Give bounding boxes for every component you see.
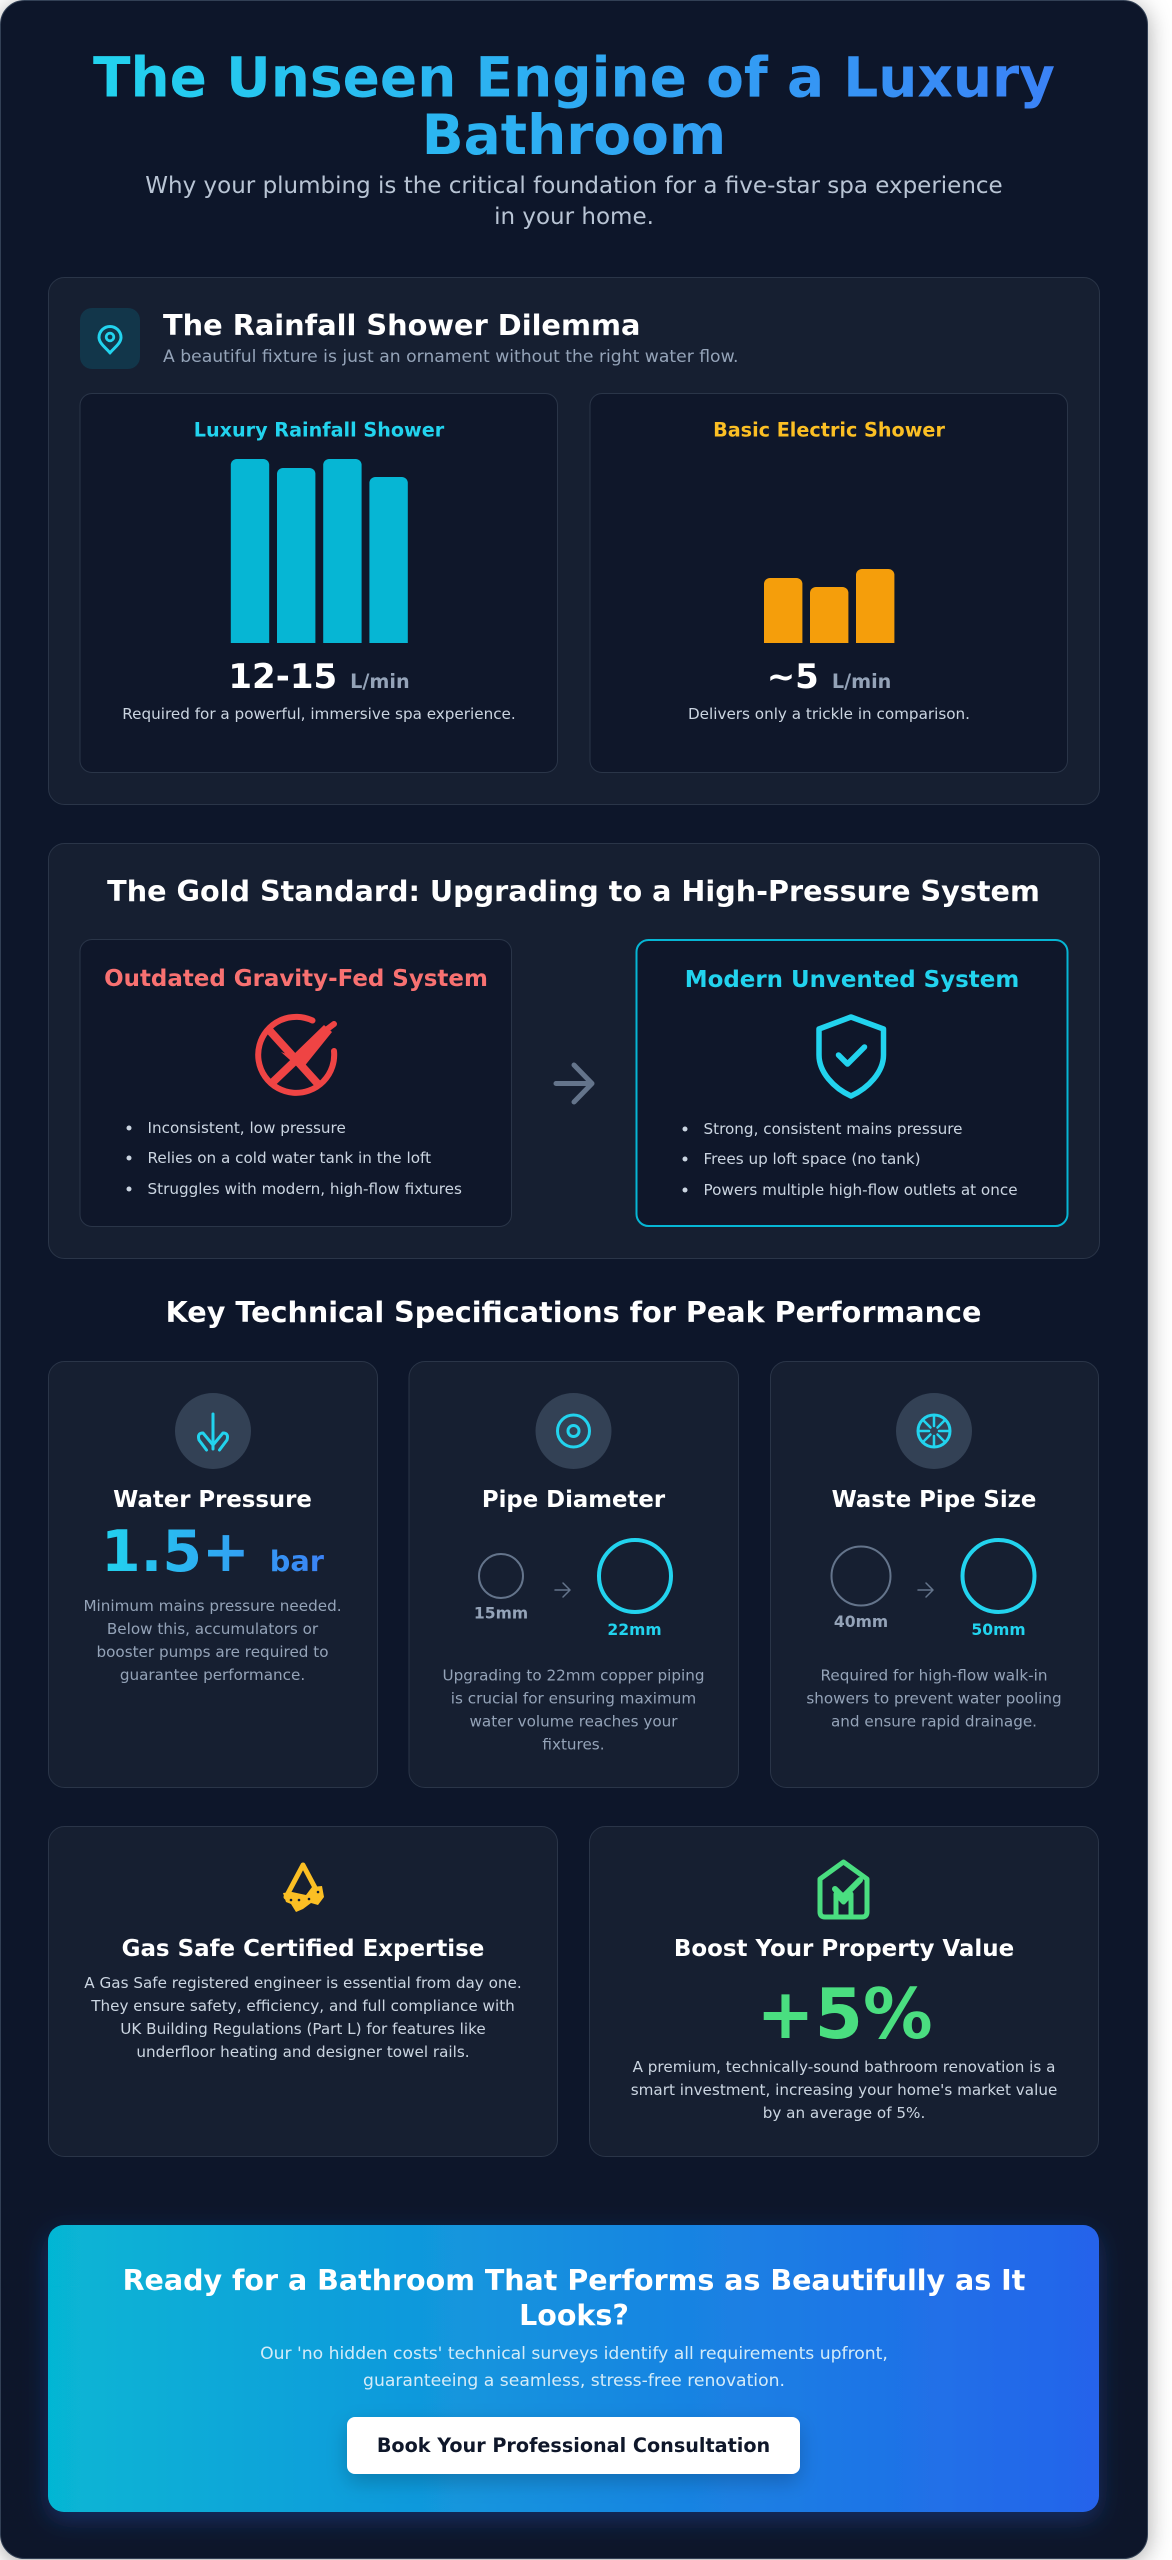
- description: Upgrading to 22mm copper piping: [442, 1666, 705, 1684]
- panel: luxury rainfall shower: [80, 394, 558, 772]
- panel: pipe diameter: [409, 1362, 738, 1788]
- diagram: 40mm to 50mm: 50mm: [971, 1621, 1026, 1639]
- icon: pipe section: [536, 1393, 612, 1469]
- diagram: 15mm to 22mm: 15mm: [474, 1604, 528, 1622]
- arrow: [556, 1065, 592, 1102]
- description: A Gas Safe registered engineer is essential from day one.: [84, 1974, 522, 1992]
- panel: basic electric shower: [590, 394, 1068, 772]
- description: They ensure safety, efficiency, and full compliance with: [90, 1997, 515, 2015]
- panel heading: Modern Unvented System: [685, 967, 1019, 993]
- card heading: Boost Your Property Value: [674, 1936, 1014, 1962]
- description: Minimum mains pressure needed.: [83, 1597, 342, 1615]
- bullet list: [126, 1119, 462, 1198]
- flow rate value: 12-15 L/min: [228, 657, 410, 697]
- cta heading: Looks?: [519, 2299, 629, 2332]
- icon: shield check: [819, 1017, 884, 1096]
- bar chart: high flow: [231, 459, 408, 643]
- stat: plus five percent: +5%: [756, 1974, 933, 2055]
- description: and ensure rapid drainage.: [831, 1712, 1037, 1730]
- bullet list: Frees up loft space (no tank): [704, 1150, 921, 1168]
- call to action: [48, 2225, 1099, 2512]
- bullet list: Inconsistent, low pressure: [148, 1119, 346, 1137]
- panel: gas safe: [48, 1826, 558, 2156]
- button: [347, 2417, 800, 2474]
- panel: property value: [590, 1826, 1098, 2156]
- panel heading: Luxury Rainfall Shower: [194, 418, 445, 442]
- description: by an average of 5%.: [763, 2104, 925, 2122]
- diagram: 40mm to 50mm: [832, 1540, 1034, 1639]
- icon: crossed out circle: [258, 1017, 334, 1093]
- diagram: 40mm to 50mm: 40mm: [834, 1613, 888, 1631]
- title: Bathroom: [422, 103, 726, 167]
- section heading: The Rainfall Shower Dilemma: [163, 308, 640, 342]
- description: underfloor heating and designer towel rails.: [136, 2043, 470, 2061]
- bullet list: Struggles with modern, high-flow fixtures: [148, 1180, 462, 1198]
- description: A premium, technically-sound bathroom renovation is a: [633, 2058, 1055, 2076]
- stat: pressure: 1.5+ bar: [101, 1519, 325, 1585]
- icon: pressure arrow: [175, 1393, 251, 1469]
- panel heading: Basic Electric Shower: [713, 418, 945, 442]
- panel: outdated system: [80, 940, 512, 1226]
- description: is crucial for ensuring maximum: [451, 1690, 696, 1708]
- panel: modern system: [636, 940, 1068, 1226]
- title: The Unseen Engine of a Luxury: [93, 46, 1055, 110]
- card heading: Pipe Diameter: [482, 1487, 666, 1513]
- icon: location pin: [80, 308, 140, 369]
- subtitle: in your home.: [494, 204, 654, 230]
- description: Required for high-flow walk-in: [821, 1666, 1047, 1684]
- description: booster pumps are required to: [96, 1643, 329, 1661]
- description: UK Building Regulations (Part L) for features like: [120, 2020, 486, 2038]
- section heading: The Gold Standard: Upgrading to a High-Pressure System: [107, 874, 1040, 908]
- section heading: key specifications: Key Technical Specifications for Peak Performance: [166, 1295, 981, 1329]
- description: smart investment, increasing your home's market value: [631, 2081, 1057, 2099]
- cta heading: Ready for a Bathroom That Performs as Beautifully as It: [123, 2264, 1025, 2297]
- cta text: guaranteeing a seamless, stress-free renovation.: [363, 2371, 785, 2391]
- panel heading: Outdated Gravity-Fed System: [104, 966, 488, 992]
- icon: waste grate: [896, 1393, 972, 1469]
- description: Below this, accumulators or: [107, 1620, 319, 1638]
- description: water volume reaches your: [470, 1712, 678, 1730]
- bullet list: [682, 1120, 1018, 1199]
- flow rate value: ~5 L/min: [767, 657, 891, 697]
- description: Delivers only a trickle in comparison.: [688, 705, 970, 723]
- description: fixtures.: [542, 1736, 605, 1754]
- diagram: 15mm to 22mm: [474, 1540, 671, 1639]
- panel: water pressure: [48, 1362, 378, 1788]
- description: showers to prevent water pooling: [806, 1690, 1062, 1708]
- icon: house with check: [820, 1862, 867, 1917]
- section subheading: A beautiful fixture is just an ornament without the right water flow.: [163, 347, 739, 367]
- bullet list: Powers multiple high-flow outlets at once: [704, 1181, 1018, 1199]
- icon: gas safe badge: [283, 1865, 324, 1912]
- panel: rainfall shower dilemma: [48, 278, 1100, 804]
- card heading: Gas Safe Certified Expertise: [122, 1936, 484, 1962]
- header: [93, 46, 1055, 230]
- diagram: 15mm to 22mm: 22mm: [607, 1621, 662, 1639]
- button: Book Your Professional Consultation: [377, 2434, 770, 2457]
- subtitle: Why your plumbing is the critical foundation for a five-star spa experience: [145, 173, 1003, 199]
- panel: gold standard: [48, 844, 1100, 1258]
- panel: waste pipe size: [770, 1362, 1098, 1788]
- card heading: Waste Pipe Size: [832, 1487, 1036, 1513]
- cta text: Our 'no hidden costs' technical surveys identify all requirements upfront,: [260, 2344, 888, 2364]
- bar chart: low flow: [764, 569, 894, 643]
- bullet list: Strong, consistent mains pressure: [704, 1120, 963, 1138]
- description: guarantee performance.: [120, 1666, 305, 1684]
- bullet list: Relies on a cold water tank in the loft: [148, 1149, 431, 1167]
- description: Required for a powerful, immersive spa experience.: [122, 705, 516, 723]
- card heading: Water Pressure: [113, 1487, 312, 1513]
